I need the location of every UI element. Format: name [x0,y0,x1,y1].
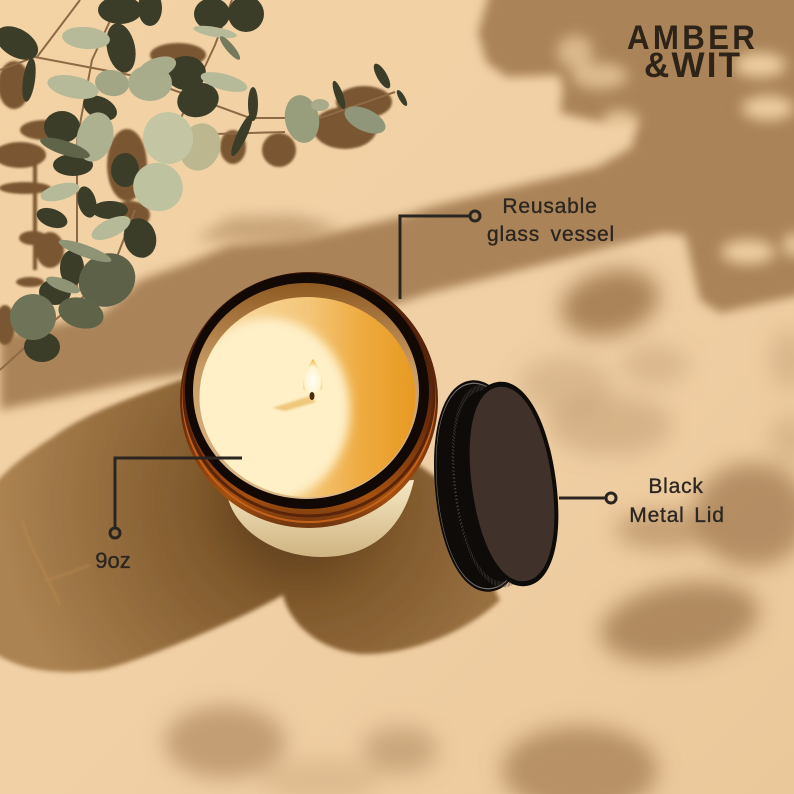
pale leaves [38,23,390,245]
eucalyptus branch [0,0,409,370]
callout text: Black [648,475,704,498]
dappled dark spots [165,259,794,794]
lid edge highlight [428,380,534,592]
amber glass highlights [183,274,435,522]
wick glow [272,396,316,411]
dappled light spots [557,35,794,264]
black rim ring [185,273,429,509]
lid top face [459,381,565,587]
leader line [400,216,470,299]
callout text: 9oz [95,548,131,573]
mid leaves [10,236,145,340]
dark leaves [0,0,409,362]
soft band top [195,215,340,245]
candle jar [180,272,438,557]
callout: reusable glass vessel [400,195,615,299]
callout: black metal lid [559,475,725,527]
lid top face rim [454,376,570,592]
callout: reusable glass vessel: glass vessel [487,223,615,246]
leader line [559,496,606,500]
sunlit wax patch [186,318,350,502]
wick [310,392,314,400]
callout text: Reusable [502,195,598,218]
logo [627,18,755,85]
callout: black metal lid: Metal Lid [629,504,725,527]
logo: AMBER [627,18,755,56]
candle and lid cast shadow [0,380,500,672]
callout: 9oz [95,458,242,573]
leader line [115,458,242,528]
lid outer side [426,376,536,596]
logo: &WIT [644,46,740,85]
amber glass [180,272,438,528]
wax body below rim [226,480,414,557]
jar lid [426,376,570,596]
refracted light in shadow [22,520,90,605]
wax surface [200,297,416,497]
lid threads [443,383,543,589]
flame [303,359,322,393]
leaf cast shadows [0,43,392,345]
inner glass [193,283,419,499]
stems [0,0,395,370]
main shadow band [0,0,794,410]
